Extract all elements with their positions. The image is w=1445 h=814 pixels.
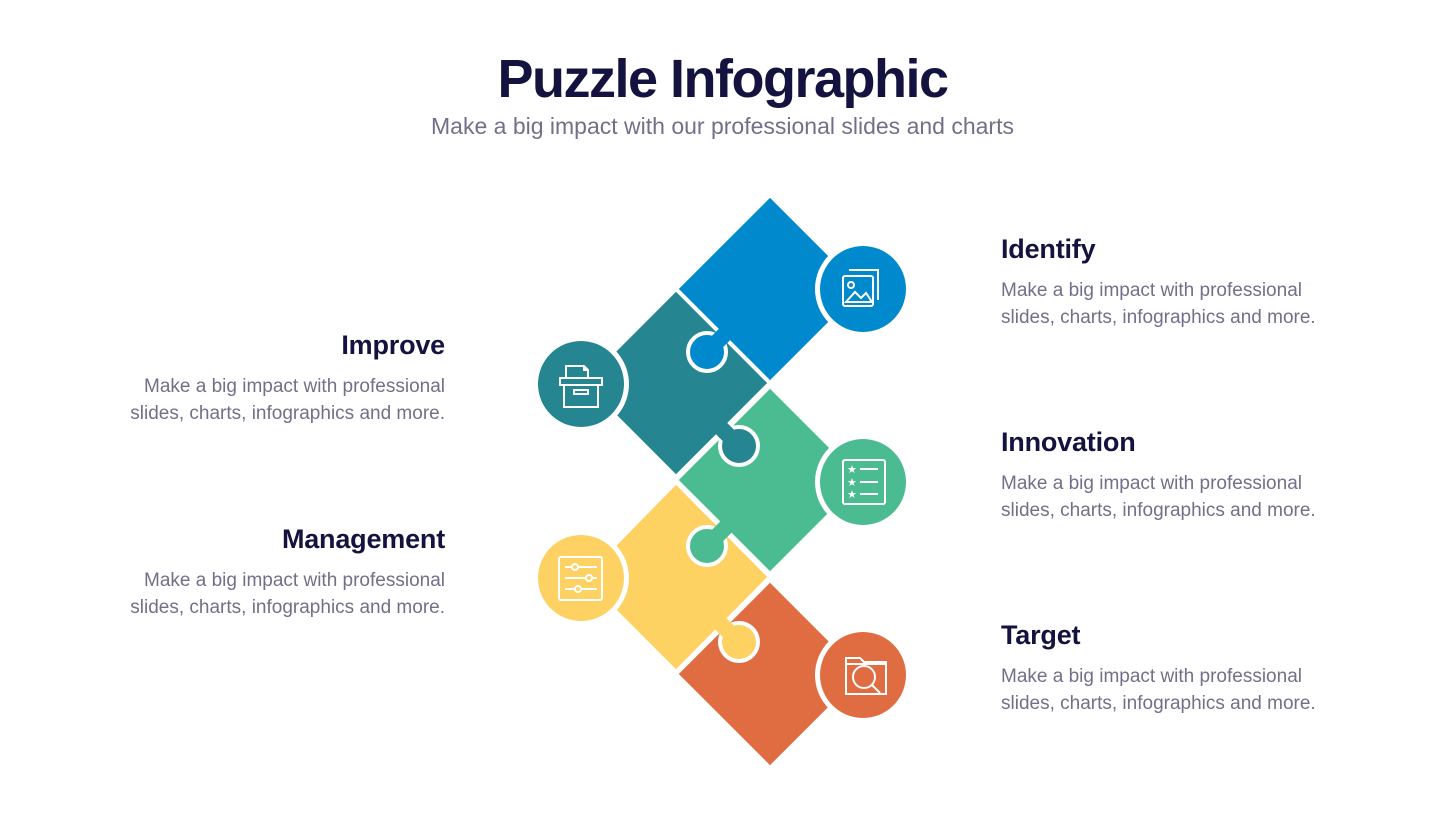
text: target: Target	[1001, 620, 1080, 650]
piece: identify	[676, 195, 864, 383]
text: improve: Make a big impact with professional slides, charts, infographics and more.	[130, 376, 445, 424]
icon circle: management (sliders)	[533, 530, 629, 626]
piece: improve	[582, 289, 770, 477]
icon circle: innovation (star list): ★	[847, 463, 857, 476]
piece: management	[582, 482, 770, 672]
subtitle: Make a big impact with our professional slides and charts	[431, 113, 1014, 139]
piece: target	[676, 580, 864, 768]
title: Puzzle Infographic	[497, 49, 948, 109]
text: management: Make a big impact with professional slides, charts, infographics and more.	[130, 570, 445, 618]
text: innovation: Make a big impact with professional slides, charts, infographics and more.	[1001, 473, 1316, 521]
text: improve: Improve	[341, 330, 445, 360]
icon circle: innovation (star list): ★	[847, 488, 857, 501]
icon circle: identify (image)	[815, 241, 911, 337]
icon circle: innovation (star list): ★	[847, 476, 857, 489]
text: innovation	[1001, 427, 1316, 521]
text: identify: Make a big impact with professional slides, charts, infographics and more.	[1001, 280, 1316, 328]
icon circle: target (folder search)	[815, 627, 911, 723]
text: innovation: Innovation	[1001, 427, 1136, 457]
text: management: Management	[282, 524, 445, 554]
text: management	[130, 524, 445, 618]
text: identify: Identify	[1001, 234, 1095, 264]
text: target: Make a big impact with professional slides, charts, infographics and more.	[1001, 666, 1316, 714]
puzzle knobs	[688, 330, 758, 661]
icon circle: innovation (star list)	[815, 434, 911, 530]
piece: innovation	[676, 386, 864, 574]
text: identify	[1001, 234, 1316, 328]
text: target	[1001, 620, 1316, 714]
text: improve	[130, 330, 445, 424]
icon circle: improve (archive box)	[533, 336, 629, 432]
